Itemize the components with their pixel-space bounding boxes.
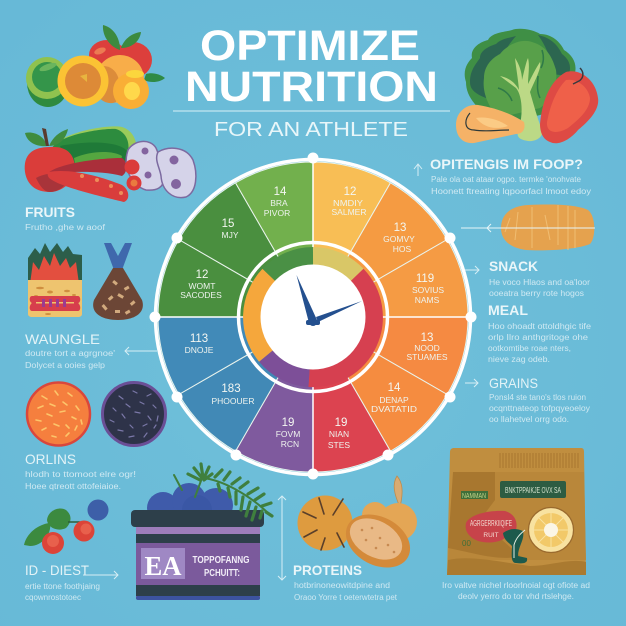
segment: blue 2	[158, 317, 313, 394]
segment labels: 12	[344, 186, 356, 198]
icon: orange grain bowl	[27, 382, 90, 446]
segment labels: BRA	[270, 198, 288, 208]
text block: orlins	[25, 451, 136, 491]
segment: orange 2	[313, 240, 468, 317]
text block: optimize in food: Pale ola oat ataar ogpo. termke 'onohvate	[431, 175, 582, 184]
segment: purple	[236, 317, 313, 472]
tub label	[141, 548, 185, 579]
text block: grains: oo llahetvel orrg odo.	[489, 415, 569, 424]
title: OPTIMIZE	[200, 22, 420, 70]
icon: snack package: AGRGERRKIIQIFE	[470, 519, 512, 528]
segment labels: 19	[335, 417, 347, 429]
clock hands	[296, 275, 362, 326]
segment labels: NOOD	[414, 343, 440, 353]
segment: green 1	[158, 240, 313, 317]
icon: vegetables and apple	[25, 126, 196, 202]
text block: meal: nieve zag odeb.	[488, 355, 550, 364]
segment: orange 1	[313, 183, 447, 317]
text block: grains: GRAINS	[489, 375, 538, 391]
segment labels: SOVIUS	[412, 285, 444, 295]
segment labels: SACODES	[180, 290, 222, 300]
icon: seed pouch	[93, 243, 143, 320]
text block: proteins: hotbrinoneowitdpine and	[294, 581, 390, 590]
segment labels: PHOOUER	[212, 396, 254, 406]
text block: proteins	[293, 562, 398, 602]
icon: mixed fruits	[26, 25, 165, 109]
text block: waungle: doutre tort a agrgnoe'	[25, 349, 116, 358]
text block: id diest: cqownrostotoec	[25, 593, 81, 602]
package dark shape	[503, 529, 527, 563]
package red blob	[466, 511, 517, 543]
tub body	[136, 527, 260, 599]
arrow: grains	[465, 379, 478, 387]
segment labels: SALMER	[332, 207, 366, 217]
inner ring	[238, 242, 388, 392]
package label	[500, 481, 566, 498]
text block: meal: MEAL	[488, 302, 528, 318]
icon: bread loaf	[501, 205, 594, 250]
text block: snack: He voco Hlaos and oa'loor	[489, 278, 590, 287]
blueberries	[147, 483, 233, 525]
segment: orange 3	[313, 317, 468, 394]
text block: meal	[488, 302, 592, 364]
segment: orange 4	[313, 317, 447, 451]
segment labels: 12	[196, 269, 208, 281]
herb sprig	[174, 464, 272, 520]
heading: fruits: FRUITS	[25, 204, 75, 220]
icon: snack package: BNKTPPAIKJE OVX SA	[505, 485, 561, 495]
segment: green 2	[179, 183, 313, 317]
text block: package caption	[442, 581, 590, 601]
segment labels: STES	[328, 440, 350, 450]
text block: proteins: Oraoo Yorre t oeterwtetra pet	[294, 593, 398, 602]
wheel outer ring	[156, 160, 470, 474]
text block: meal: Hoo ohoadt ottoldhgic tife	[488, 322, 592, 331]
text block: waungle: WAUNGLE	[25, 331, 100, 347]
icon: cookie and bread	[298, 476, 419, 578]
icon: snack package: RUIT	[483, 532, 499, 539]
title	[185, 22, 438, 111]
segment: red	[313, 317, 390, 472]
segment labels: DVATATID	[371, 404, 417, 414]
icon: snack package	[447, 448, 586, 575]
segment labels: 183	[221, 383, 241, 395]
icon: snack package: NAMMAN	[462, 493, 486, 500]
segment labels: NAMS	[415, 295, 440, 305]
segment labels: NIAN	[329, 429, 349, 439]
text block: snack	[489, 258, 590, 298]
text block: id diest: ID - DIEST	[25, 562, 89, 578]
segment: light green	[236, 162, 313, 317]
segment labels: WOMT	[189, 281, 215, 291]
segment labels: DNOJE	[185, 345, 214, 355]
icon: broccoli carrot and pepper	[456, 29, 598, 143]
title: NUTRITION	[185, 63, 438, 111]
icon: blueberry tub	[131, 464, 272, 600]
segment labels: PIVOR	[264, 208, 290, 218]
text block: waungle: Dolycet a ooies gelp	[25, 361, 106, 370]
segment labels: GOMVY	[383, 234, 415, 244]
segment labels: MJY	[222, 230, 239, 240]
text block: orlins: ORLINS	[25, 451, 76, 467]
wheel nodes	[150, 152, 476, 480]
text block: snack: ooeatra berry rote hogos	[489, 289, 584, 298]
text block: meal: orlp Ilro anthgritoge ohe	[488, 333, 589, 342]
text block: orlins: hlodh to ttomoot elre ogr!	[25, 470, 136, 479]
text block: optimize in food	[430, 156, 591, 196]
icon: blueberry tub: EA	[144, 551, 182, 581]
icon: snack package: 00	[462, 539, 471, 548]
text block: optimize in food: Hoonett ftreating lqpoorfacl lmoot edoy	[431, 187, 591, 196]
segment labels: RCN	[281, 439, 299, 449]
segment: yellow	[313, 162, 390, 317]
package citrus	[528, 508, 574, 552]
segment labels: HOS	[393, 244, 412, 254]
icon: blueberry tub: TOPPOFANNG	[192, 555, 250, 566]
segment labels: STUAMES	[406, 352, 448, 362]
text block: optimize in food: OPITENGIS IM FOOP?	[430, 156, 583, 172]
text block: package caption: deolv yerro do tor vhd rtslehge.	[458, 592, 574, 601]
segment labels: DENAP	[379, 395, 409, 405]
text block: id diest: ertie ttone foothjaing	[25, 582, 100, 591]
icon: blueberry tub: PCHUITT:	[204, 568, 240, 579]
tub lid	[131, 510, 264, 527]
segment labels: 119	[416, 273, 434, 285]
arrow: double vertical	[278, 496, 286, 580]
text block: proteins: PROTEINS	[293, 562, 362, 578]
segment labels: FOVM	[276, 429, 300, 439]
text block: grains: ocqnttnateop tofpqyeoeloy	[489, 404, 590, 413]
text block: snack: SNACK	[489, 258, 538, 274]
heading: fruits: Frutho ,ghe w aoof	[25, 223, 106, 232]
icon: layered snack bar	[28, 243, 82, 317]
segment labels: 15	[222, 218, 234, 230]
segment labels: 14	[388, 382, 401, 394]
text block: grains: Ponsl4 ste tano's tlos ruion	[489, 393, 586, 402]
clock face	[260, 264, 366, 370]
arrow: id diest	[83, 571, 118, 579]
text block: id diest	[25, 562, 100, 602]
subtitle: FOR AN ATHLETE	[214, 118, 408, 141]
segment labels: 14	[274, 186, 287, 198]
text block: orlins: Hoee qtreott ottofeiaioe.	[25, 482, 121, 491]
segment labels: 19	[282, 417, 294, 429]
heading: fruits	[25, 204, 106, 232]
arrow: waungle	[125, 347, 157, 355]
icon: berries	[24, 500, 108, 554]
arrow: snack	[465, 266, 479, 274]
segment labels: 13	[421, 332, 433, 344]
text block: waungle	[25, 331, 116, 370]
text block: grains	[489, 375, 590, 424]
segment labels: 113	[190, 333, 208, 345]
icon: dark seed bowl	[102, 382, 166, 446]
segment: blue 1	[179, 317, 313, 451]
segment labels	[180, 186, 448, 450]
arrow: long pointer	[461, 224, 595, 232]
text block: meal: ootkomtibe roae nters,	[488, 344, 571, 353]
wheel chart	[150, 152, 476, 480]
arrow: up	[414, 164, 422, 176]
text block: package caption: Iro valtve nichel rloorlnoial ogt ofiote ad	[442, 581, 590, 590]
segment labels: 13	[394, 222, 406, 234]
package badge	[461, 491, 488, 499]
segment labels: NMDIY	[333, 198, 363, 208]
